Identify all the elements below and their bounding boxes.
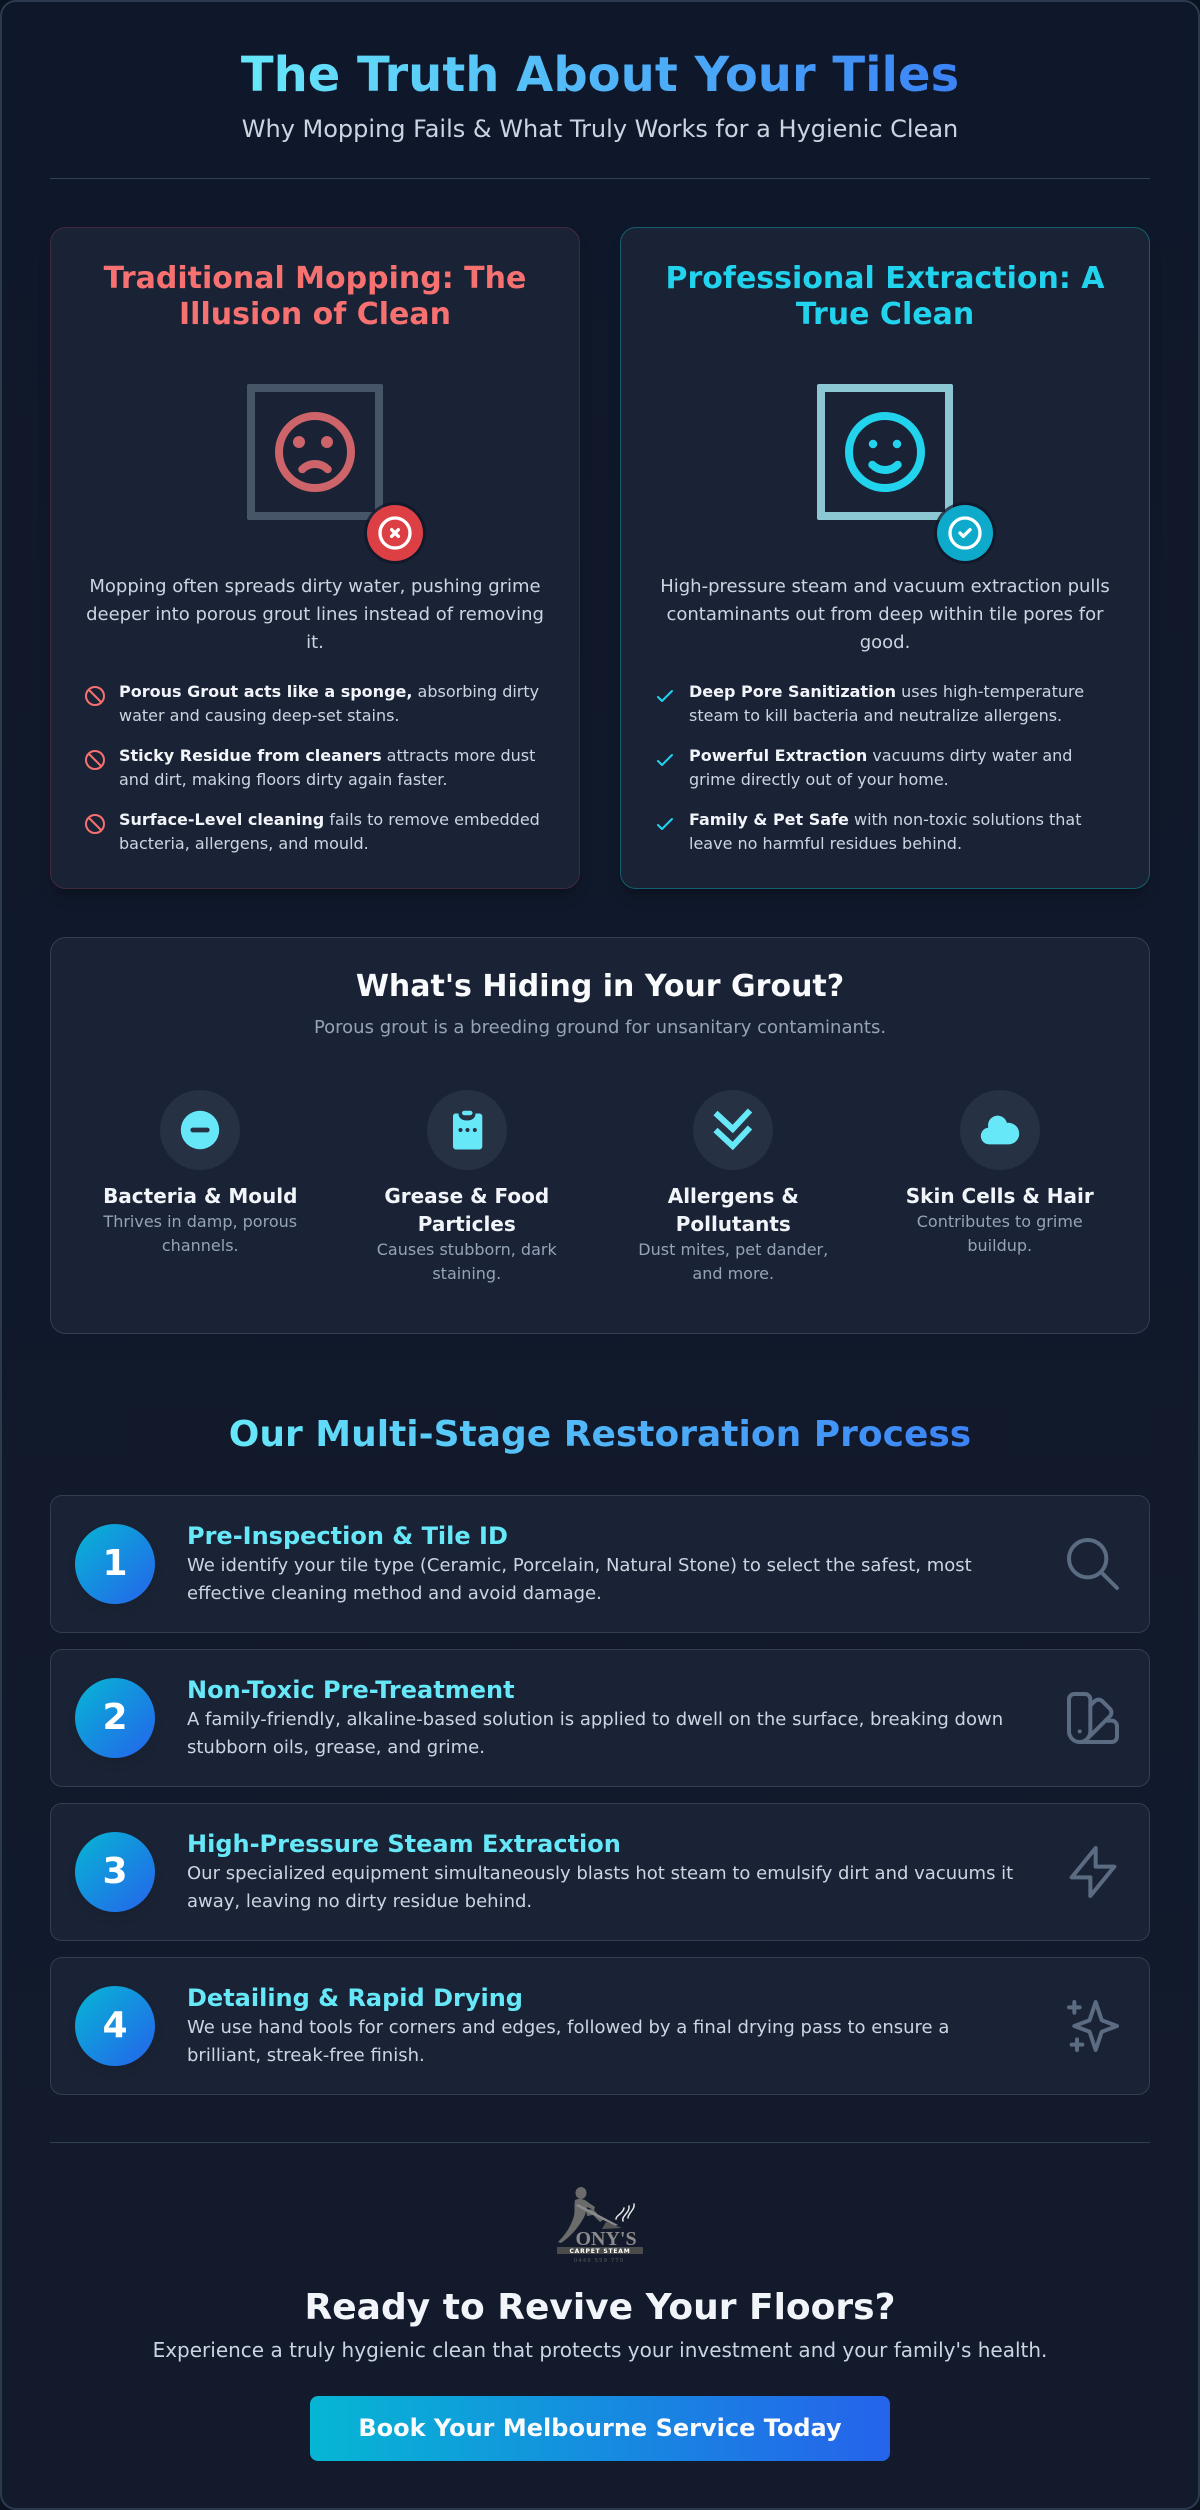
step 3: [50, 1803, 1150, 1941]
text: extraction description: contaminants out from deep within tile pores for: [666, 604, 1104, 625]
icon: sparkles: [1067, 2000, 1119, 2052]
step text: [187, 1863, 1013, 1912]
step 2: [50, 1649, 1150, 1787]
list: extraction benefits: [657, 682, 1084, 853]
text: surface-level: [119, 810, 540, 853]
description: channels.: [162, 1236, 239, 1255]
text: deep pore sanitization: Deep Pore Sanitization uses high-temperature: [689, 682, 1084, 701]
description: Contributes to grime: [917, 1212, 1083, 1231]
description: [103, 1212, 297, 1255]
step text: A family-friendly, alkaline-based solution is applied to dwell on the surface, breaking down: [187, 1709, 1003, 1730]
label: Particles: [418, 1212, 516, 1236]
text: porous grout: water and causing deep-set stains.: [119, 706, 400, 725]
heading: restoration process: Our Multi-Stage Restoration Process: [229, 1414, 971, 1455]
number 1: 1: [102, 1543, 128, 1584]
logo: ONY'S: [575, 2228, 637, 2250]
panel: what's hiding in your grout: [50, 937, 1150, 1334]
step title: High-Pressure Steam Extraction: [187, 1830, 621, 1858]
icon: ban: [85, 750, 105, 770]
description: [638, 1240, 828, 1283]
step text: [187, 1709, 1003, 1758]
label: Bacteria & Mould: [103, 1184, 297, 1208]
text: family and pet safe: Family & Pet Safe with non-toxic solutions that: [689, 810, 1082, 829]
heading: traditional mopping: Traditional Mopping: The: [104, 261, 526, 296]
heading: professional extraction: True Clean: [796, 297, 974, 332]
step title: Pre-Inspection & Tile ID: [187, 1522, 508, 1550]
item: grease and food particles: [377, 1090, 557, 1283]
description: Dust mites, pet dander,: [638, 1240, 828, 1259]
step 4: [50, 1957, 1150, 2095]
logo: 0449 559 770: [574, 2258, 624, 2264]
text: sticky residue: Sticky Residue from cleaners attracts more dust: [119, 746, 535, 765]
description: staining.: [432, 1264, 501, 1283]
icon: lightning: [1070, 1846, 1116, 1898]
icon: minus circle: [160, 1090, 240, 1170]
step title: Non-Toxic Pre-Treatment: [187, 1676, 515, 1704]
text: mopping description: [86, 576, 544, 653]
heading: what's hiding: What's Hiding in Your Grout?: [356, 969, 844, 1004]
text: family and pet safe: [689, 810, 1082, 853]
number 2: 2: [102, 1697, 128, 1738]
number 3: 3: [102, 1851, 128, 1892]
step text: brilliant, streak-free finish.: [187, 2045, 425, 2066]
step title: Detailing & Rapid Drying: [187, 1984, 523, 2012]
text: grout subheading: Porous grout is a breeding ground for unsanitary contaminants.: [314, 1017, 886, 1038]
number 3: [75, 1832, 155, 1912]
icon: dirty tile with sad face: [247, 384, 426, 564]
step text: [187, 2017, 949, 2066]
text: sticky residue: and dirt, making floors dirty again faster.: [119, 770, 447, 789]
icon: clean tile with happy face: [817, 384, 996, 564]
step 1: [50, 1495, 1150, 1633]
item: allergens and pollutants: [638, 1090, 828, 1283]
text: extraction description: High-pressure steam and vacuum extraction pulls: [660, 576, 1110, 597]
text: powerful extraction: [689, 746, 1072, 789]
text: powerful extraction: Powerful Extraction vacuums dirty water and: [689, 746, 1072, 765]
text: mopping description: it.: [306, 632, 324, 653]
panel: professional extraction: [620, 227, 1150, 889]
step text: stubborn oils, grease, and grime.: [187, 1737, 485, 1758]
text: mopping description: Mopping often spreads dirty water, pushing grime: [89, 576, 541, 597]
heading: professional extraction: [666, 261, 1104, 332]
icon: check: [657, 818, 673, 830]
text: porous grout: [119, 682, 539, 725]
number 4: 4: [102, 2005, 128, 2046]
label: Pollutants: [676, 1212, 791, 1236]
subtitle: Why Mopping Fails & What Truly Works for a Hygienic Clean: [242, 115, 958, 143]
text: surface-level: Surface-Level cleaning fails to remove embedded: [119, 810, 540, 829]
logo: CARPET STEAM: [569, 2248, 631, 2255]
logo: [550, 2182, 650, 2266]
icon: check: [657, 754, 673, 766]
step text: [187, 1555, 972, 1604]
text: deep pore sanitization: [689, 682, 1084, 725]
text: extraction description: good.: [860, 632, 910, 653]
description: [917, 1212, 1083, 1255]
description: Thrives in damp, porous: [103, 1212, 297, 1231]
step text: Our specialized equipment simultaneously blasts hot steam to emulsify dirt and vacuums it: [187, 1863, 1013, 1884]
heading: traditional mopping: [104, 261, 526, 332]
panel: traditional mopping: [50, 227, 580, 889]
text: mopping description: deeper into porous grout lines instead of removing: [86, 604, 544, 625]
icon: ban: [85, 814, 105, 834]
label: Grease & Food: [384, 1184, 549, 1208]
step text: away, leaving no dirty residue behind.: [187, 1891, 532, 1912]
icon: check: [657, 690, 673, 702]
step text: We identify your tile type (Ceramic, Porcelain, Natural Stone) to select the safest, most: [187, 1555, 972, 1576]
title: The Truth About Your Tiles: [241, 47, 959, 103]
step text: effective cleaning method and avoid damage.: [187, 1583, 602, 1604]
text: extraction description: [660, 576, 1110, 653]
button: book service: Book Your Melbourne Service Today: [358, 2414, 842, 2442]
number 2: [75, 1678, 155, 1758]
icon: color swatch: [1067, 1692, 1119, 1744]
label: Skin Cells & Hair: [906, 1184, 1094, 1208]
text: family and pet safe: leave no harmful residues behind.: [689, 834, 962, 853]
icon: ban: [85, 686, 105, 706]
text: surface-level: bacteria, allergens, and mould.: [119, 834, 369, 853]
list: mopping problems: [85, 682, 540, 853]
text: deep pore sanitization: steam to kill bacteria and neutralize allergens.: [689, 706, 1062, 725]
heading: call to action: Ready to Revive Your Floors?: [305, 2287, 895, 2328]
description: Causes stubborn, dark: [377, 1240, 557, 1259]
icon: cloud: [960, 1090, 1040, 1170]
description: and more.: [692, 1264, 774, 1283]
description: buildup.: [967, 1236, 1032, 1255]
heading: professional extraction: Professional Extraction: A: [666, 261, 1104, 296]
heading: traditional mopping: Illusion of Clean: [179, 297, 451, 332]
number 1: [75, 1524, 155, 1604]
label: [384, 1184, 549, 1236]
button: book service: [310, 2396, 890, 2461]
item: skin cells and hair: [906, 1090, 1094, 1255]
text: porous grout: Porous Grout acts like a sponge, absorbing dirty: [119, 682, 539, 701]
icon: search: [1067, 1538, 1119, 1590]
step text: We use hand tools for corners and edges, followed by a final drying pass to ensure a: [187, 2017, 949, 2038]
item: bacteria and mould: [103, 1090, 297, 1255]
description: [377, 1240, 557, 1283]
label: Allergens &: [668, 1184, 799, 1208]
icon: double chevron: [693, 1090, 773, 1170]
text: powerful extraction: grime directly out of your home.: [689, 770, 949, 789]
label: [668, 1184, 799, 1236]
text: sticky residue: [119, 746, 535, 789]
number 4: [75, 1986, 155, 2066]
text: call to action: Experience a truly hygienic clean that protects your investment and your family's health.: [153, 2338, 1047, 2362]
icon: clipboard: [427, 1090, 507, 1170]
